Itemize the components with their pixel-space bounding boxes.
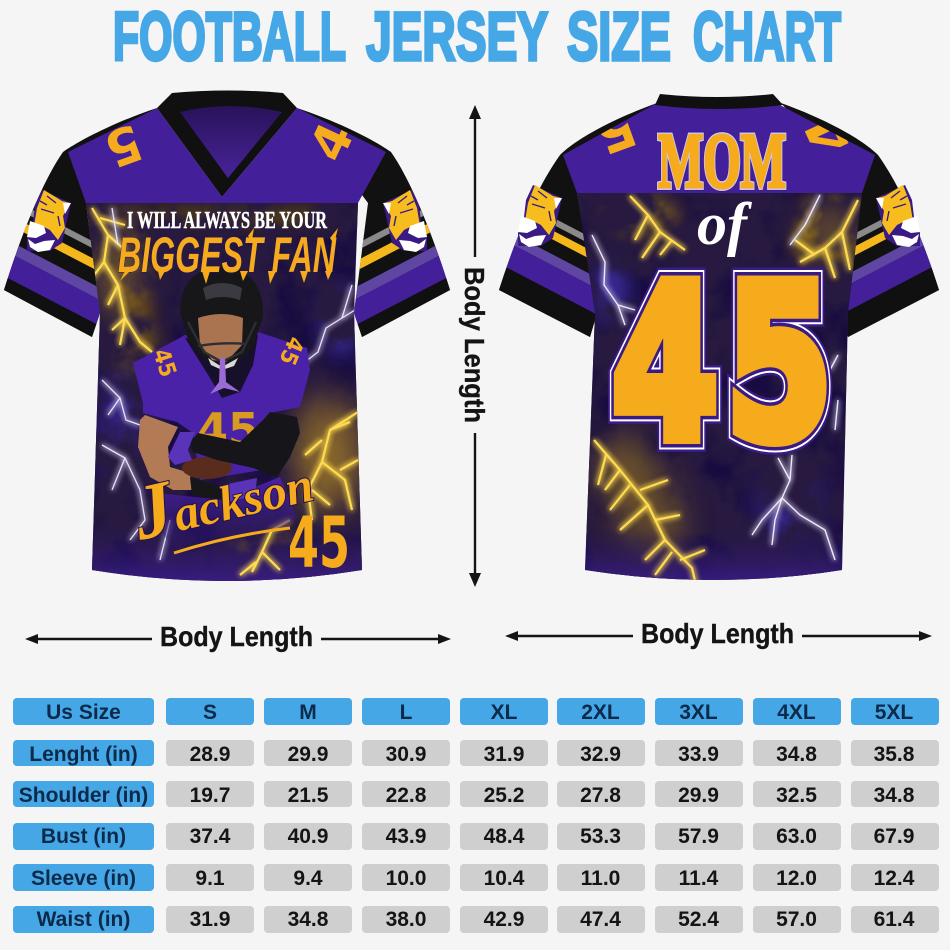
length row: 35.8	[874, 743, 915, 766]
horizontal measure arrow, back: Body Length	[641, 618, 794, 649]
title: SIZE	[567, 0, 671, 75]
waist row: 31.9	[190, 908, 230, 931]
big number 4: 4	[612, 241, 718, 487]
right sleeve, back	[781, 103, 950, 364]
name on back: MOM	[658, 117, 786, 204]
big number 5: 5	[726, 241, 832, 487]
left sleeve, back	[476, 103, 657, 364]
bust row	[13, 823, 939, 850]
horizontal measure arrow, front: Body Length	[160, 621, 313, 652]
upper torso and shoulder pads	[133, 332, 310, 480]
big number 4: 4	[612, 241, 718, 487]
name underline	[174, 528, 290, 553]
header row: S	[203, 701, 217, 724]
vertical measure arrow	[459, 105, 490, 587]
waist row: 38.0	[386, 908, 426, 931]
player arm skin	[138, 415, 192, 490]
length row: Lenght (in)	[29, 743, 138, 766]
front jersey	[0, 82, 474, 590]
vertical measure arrow: Body Length	[459, 267, 490, 423]
header row: L	[400, 701, 413, 724]
shoulder row	[13, 781, 939, 807]
bust row: 48.4	[484, 825, 525, 848]
big number 5: 5	[726, 241, 832, 487]
player shoulder numbers: 45	[274, 333, 308, 369]
sleeve row: Sleeve (in)	[31, 867, 136, 890]
waist row: 42.9	[484, 908, 524, 931]
left sleeve, front	[0, 108, 157, 366]
name: Jackson	[123, 431, 320, 557]
length row: 30.9	[386, 743, 426, 766]
waist row	[13, 906, 939, 933]
length row: 32.9	[580, 743, 621, 766]
yellow lightning front	[92, 208, 358, 575]
shoulder row: Shoulder (in)	[19, 784, 148, 807]
sleeve row: 12.0	[776, 867, 817, 890]
black arm sleeve	[190, 412, 300, 477]
big number 5: 5	[726, 241, 832, 487]
player photo	[133, 267, 310, 547]
facemask	[188, 322, 256, 362]
name on back: MOM	[658, 117, 786, 204]
shoulder number right: 45	[298, 82, 380, 170]
header row: Us Size	[46, 701, 121, 724]
sleeve row: 11.0	[581, 867, 620, 890]
header row: XL	[491, 701, 518, 724]
player undershirt	[185, 335, 258, 398]
lower forearm	[190, 477, 223, 500]
header row: 5XL	[875, 701, 913, 724]
yellow lightning back	[594, 196, 858, 585]
gloves	[168, 432, 257, 503]
yoke, front	[68, 108, 386, 203]
biggest fan: BIGGEST FAN	[118, 227, 337, 283]
back shoulder numbers: 4	[791, 100, 869, 165]
helmet highlight	[203, 283, 242, 300]
length row: 31.9	[484, 743, 524, 766]
slogan line: I WILL ALWAYS BE YOUR	[127, 208, 327, 234]
waist row: 47.4	[580, 908, 621, 931]
bust row: 57.9	[678, 825, 719, 848]
sleeve row: 12.4	[874, 867, 915, 890]
purple-white lightning front	[102, 208, 355, 560]
shoulder row: 25.2	[484, 784, 524, 807]
title: JERSEY	[366, 0, 548, 75]
size table	[13, 698, 939, 933]
front hem number: 45	[288, 502, 350, 584]
back shoulder numbers: 5	[584, 90, 645, 168]
waist row: 61.4	[874, 908, 915, 931]
collar inner	[172, 95, 290, 185]
sleeve row: 11.4	[679, 867, 719, 890]
big number 5: 5	[726, 241, 832, 487]
title: FOOTBALL	[113, 0, 346, 75]
shoulder row: 21.5	[288, 784, 329, 807]
bust row: 37.4	[190, 825, 231, 848]
header row: 3XL	[679, 701, 718, 724]
of script: of	[697, 191, 752, 257]
football	[182, 457, 232, 479]
yoke, back	[563, 103, 875, 193]
back collar	[655, 94, 783, 109]
collar V band	[157, 90, 297, 197]
length row	[13, 740, 939, 766]
bust row: 40.9	[288, 825, 328, 848]
waist row: 52.4	[678, 908, 719, 931]
sleeve row: 9.1	[195, 867, 225, 890]
bust row: 43.9	[386, 825, 426, 848]
mouthguard	[210, 358, 240, 394]
title	[113, 0, 841, 75]
back shoulder numbers	[600, 122, 848, 154]
player helmet	[180, 267, 263, 367]
shoulder number left: 5	[97, 112, 150, 178]
player chest number: 45	[197, 403, 259, 457]
right sleeve, front	[297, 108, 474, 366]
player shoulder numbers	[147, 333, 308, 380]
biggest fan	[118, 227, 338, 284]
shoulder row: 29.9	[678, 784, 719, 807]
sleeve row: 9.4	[293, 867, 323, 890]
length row: 34.8	[776, 743, 817, 766]
bust row: 53.3	[580, 825, 621, 848]
title: CHART	[693, 0, 841, 75]
length row: 29.9	[288, 743, 328, 766]
header row: 4XL	[777, 701, 816, 724]
big number 4: 4	[612, 241, 718, 487]
horizontal measure arrow, front	[25, 621, 451, 652]
length row: 28.9	[190, 743, 230, 766]
name on back: MOM	[658, 117, 786, 204]
bust row: Bust (in)	[41, 825, 126, 848]
shoulder row: 32.5	[776, 784, 817, 807]
lower torso	[157, 477, 297, 547]
back lightning panel	[575, 190, 865, 590]
header row	[13, 698, 939, 725]
back jersey	[476, 90, 950, 590]
chin strap	[208, 358, 238, 370]
length row: 33.9	[678, 743, 719, 766]
name on back	[658, 117, 786, 204]
horizontal measure arrow, back	[505, 618, 932, 649]
header row: 2XL	[581, 701, 620, 724]
shoulder row: 34.8	[874, 784, 915, 807]
sleeve row: 10.4	[484, 867, 525, 890]
shoulder row: 19.7	[190, 784, 230, 807]
bust row: 67.9	[874, 825, 914, 848]
waist row: 57.0	[776, 908, 817, 931]
player face	[198, 314, 243, 362]
header row: M	[299, 701, 317, 724]
big number 4: 4	[612, 241, 718, 487]
player shoulder numbers: 45	[147, 346, 181, 380]
waist row: 34.8	[288, 908, 329, 931]
front body lightning panel	[80, 195, 370, 590]
sleeve row	[13, 864, 939, 891]
shoulder row: 27.8	[580, 784, 621, 807]
shoulder row: 22.8	[386, 784, 427, 807]
waist row: Waist (in)	[37, 908, 130, 931]
sleeve row: 10.0	[386, 867, 426, 890]
bust row: 63.0	[776, 825, 817, 848]
purple-white lightning back	[592, 195, 838, 560]
